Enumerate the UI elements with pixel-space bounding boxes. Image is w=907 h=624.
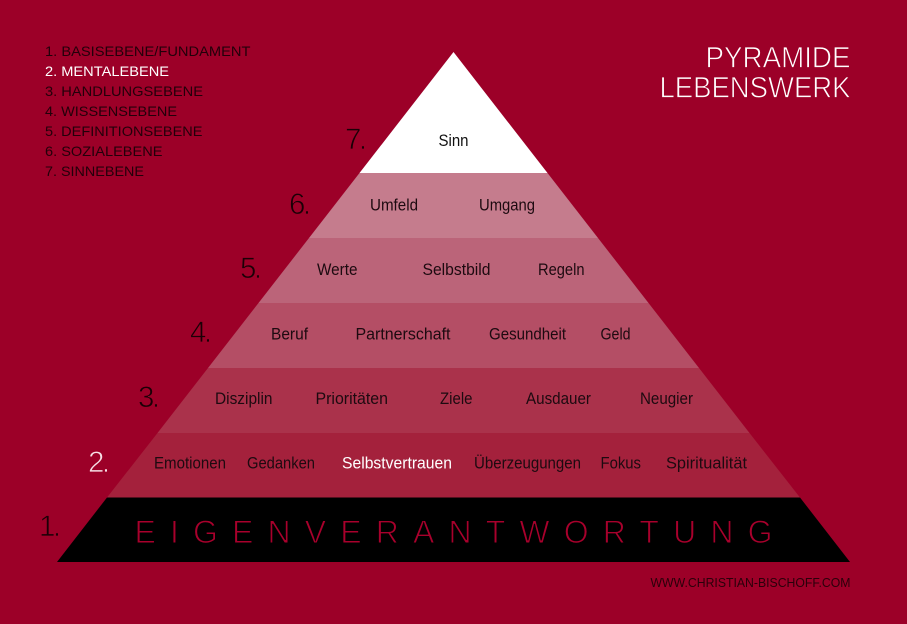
legend <box>45 43 251 179</box>
level 3: Handlungsebene: Ausdauer <box>526 389 591 408</box>
level numbers: 2. <box>88 446 108 479</box>
legend: 7. SINNEBENE <box>45 163 144 179</box>
level 2: Mentalebene <box>107 433 800 498</box>
level 5: Definitionsebene: Regeln <box>538 260 584 279</box>
website credit: WWW.CHRISTIAN-BISCHOFF.COM <box>650 575 850 590</box>
level 5: Definitionsebene <box>258 238 648 303</box>
level 3: Handlungsebene <box>158 368 750 433</box>
legend: 5. DEFINITIONSEBENE <box>45 123 202 139</box>
legend: 6. SOZIALEBENE <box>45 143 162 159</box>
level 2: Mentalebene: Überzeugungen <box>474 454 581 472</box>
title: PYRAMIDE <box>706 41 850 74</box>
level 7: Sinn <box>360 52 548 173</box>
level 2: Mentalebene: Fokus <box>600 454 641 472</box>
level numbers: 7. <box>345 123 365 156</box>
title: LEBENSWERK <box>660 72 851 105</box>
level 2: Mentalebene: Gedanken <box>247 454 315 472</box>
level 3: Handlungsebene: Ziele <box>440 389 472 408</box>
level 4: Wissensebene: Geld <box>600 324 630 344</box>
level 4: Wissensebene <box>208 303 699 368</box>
legend: 4. WISSENSEBENE <box>45 103 177 119</box>
level numbers: 3. <box>138 381 158 414</box>
level 1: Eigenverantwortung: EIGENVERANTWORTUNG <box>134 514 772 550</box>
level 4: Wissensebene: Beruf <box>271 324 308 344</box>
level 5: Definitionsebene: Selbstbild <box>422 260 490 279</box>
level 3: Handlungsebene: Neugier <box>640 389 693 408</box>
level 4: Wissensebene: Partnerschaft <box>356 324 451 344</box>
level 6: Sozialebene: Umgang <box>479 196 535 214</box>
level 2: Mentalebene: Selbstvertrauen <box>342 454 452 472</box>
level 3: Handlungsebene: Prioritäten <box>316 389 388 408</box>
level 6: Sozialebene: Umfeld <box>370 196 418 214</box>
level numbers <box>39 123 365 543</box>
level numbers: 1. <box>39 510 59 543</box>
level numbers: 6. <box>289 188 309 221</box>
level numbers: 4. <box>190 316 210 349</box>
level 1: Eigenverantwortung <box>57 498 850 562</box>
level 3: Handlungsebene: Disziplin <box>215 389 272 408</box>
level 4: Wissensebene: Gesundheit <box>489 324 566 344</box>
legend: 1. BASISEBENE/FUNDAMENT <box>45 43 251 59</box>
level 7: Sinn: Sinn <box>438 131 468 150</box>
pyramid <box>57 52 850 562</box>
level 2: Mentalebene: Spiritualität <box>666 454 747 472</box>
level numbers: 5. <box>240 252 260 285</box>
level 6: Sozialebene <box>309 173 598 238</box>
level 5: Definitionsebene: Werte <box>317 260 358 279</box>
legend: 2. MENTALEBENE <box>45 63 169 79</box>
legend: 3. HANDLUNGSEBENE <box>45 83 203 99</box>
level 2: Mentalebene: Emotionen <box>154 454 226 472</box>
title <box>660 41 851 105</box>
